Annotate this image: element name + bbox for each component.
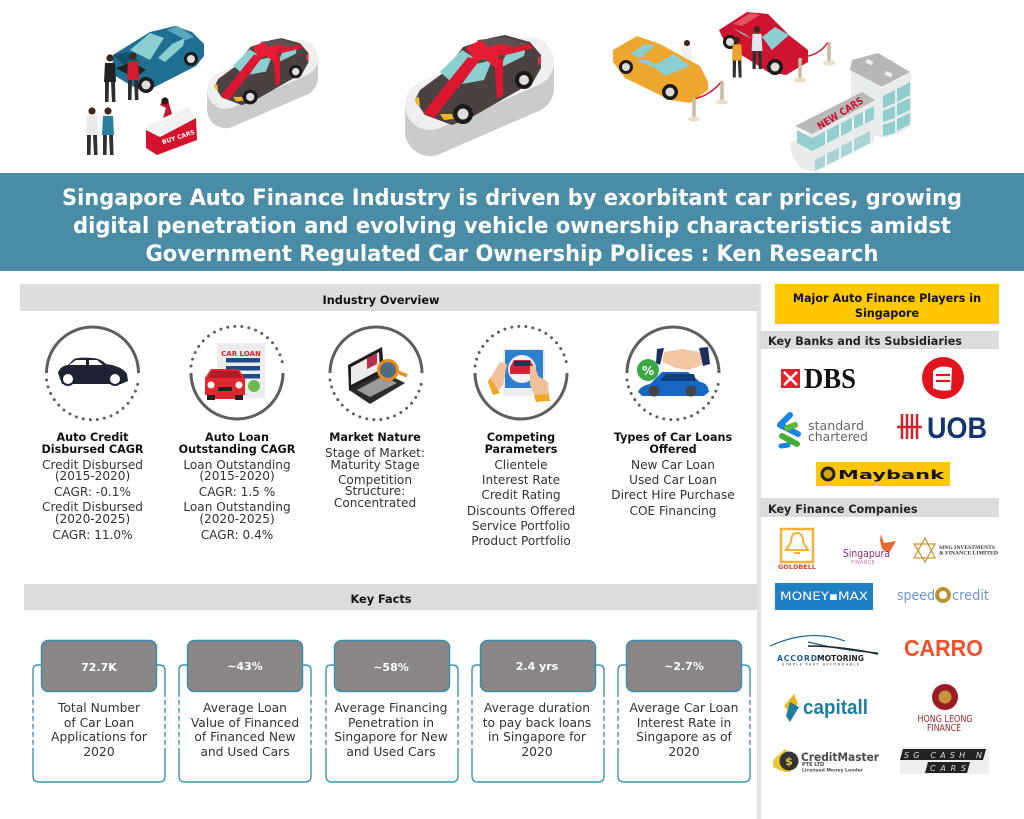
card: loan applications: 72.7K bbox=[81, 661, 117, 674]
column: auto credit disbursed: CAGR: 11.0% bbox=[52, 528, 133, 542]
column: types of car loans bbox=[611, 327, 735, 518]
card: loan applications: of Car Loan bbox=[64, 716, 134, 730]
logo: DBS: DBS bbox=[804, 364, 856, 395]
logo: Singapura Finance bbox=[843, 534, 896, 566]
column: competing parameters bbox=[467, 326, 575, 548]
illustration: salesman behind yellow car bbox=[682, 40, 692, 80]
column: market nature: Market Nature bbox=[329, 431, 421, 444]
card: loan applications: 2020 bbox=[83, 745, 115, 759]
title line 3: Government Regulated Car Ownership Polices : Ken Research bbox=[146, 242, 878, 267]
card: interest rate: 2020 bbox=[668, 745, 700, 759]
sidebar heading: major players bbox=[775, 284, 999, 324]
icon: handshake and blue car: % bbox=[642, 364, 654, 378]
logo: Accord Motoring: SIMPLE FAST AFFORDABLE bbox=[782, 662, 860, 666]
logo: Standard Chartered: chartered bbox=[808, 429, 868, 444]
column: market nature bbox=[325, 327, 425, 510]
column: market nature: Structure: bbox=[345, 484, 405, 498]
column: auto credit disbursed: Credit Disbursed bbox=[42, 458, 143, 472]
column: auto loan outstanding: (2015-2020) bbox=[199, 469, 275, 483]
logo: UOB bbox=[897, 412, 987, 445]
column: types of car loans: Direct Hire Purchase bbox=[611, 488, 735, 502]
card: loan applications: Applications for bbox=[51, 730, 148, 744]
card: interest rate: Average Car Loan bbox=[630, 701, 738, 715]
card: interest rate: Singapore as of bbox=[636, 730, 732, 744]
logo: Speed Credit: speed bbox=[897, 588, 935, 604]
card: financing penetration: ~58% bbox=[373, 661, 409, 674]
column: auto credit disbursed bbox=[41, 327, 144, 542]
heading: key facts bbox=[24, 584, 757, 610]
icon: car loan document bbox=[205, 343, 265, 400]
logo: CreditMaster: CreditMaster bbox=[801, 750, 879, 764]
person: man in white bbox=[86, 107, 98, 155]
person: salesman by red car bbox=[752, 26, 762, 69]
column: market nature: Maturity Stage bbox=[330, 458, 420, 472]
column: auto loan outstanding: Auto Loan bbox=[205, 431, 269, 444]
card: payback duration: 2020 bbox=[521, 745, 553, 759]
logo: Accord Motoring: MOTORING bbox=[817, 654, 864, 663]
logo: MoneyMax: MONEY▪MAX bbox=[780, 589, 868, 603]
logo: SG Cash N Cars: CARS bbox=[930, 764, 966, 773]
logo: Hong Leong Finance: HONG LEONG bbox=[918, 714, 972, 725]
card: loan applications bbox=[33, 640, 165, 782]
sidebar heading: key finance companies bbox=[760, 498, 999, 517]
card: financing penetration: Singapore for New bbox=[334, 730, 448, 744]
heading: key facts: Key Facts bbox=[350, 593, 412, 606]
column: auto credit disbursed: (2015-2020) bbox=[55, 469, 130, 483]
card: interest rate: Interest Rate in bbox=[637, 716, 731, 730]
column: auto loan outstanding bbox=[179, 326, 296, 542]
logo: Standard Chartered: standard bbox=[808, 418, 864, 433]
logo: Maybank bbox=[816, 462, 950, 486]
illustration: dealership team and blue car bbox=[86, 26, 204, 155]
person: man in blue bbox=[102, 107, 114, 155]
column: auto credit disbursed: Credit Disbursed bbox=[42, 500, 143, 514]
column: auto credit disbursed: CAGR: -0.1% bbox=[54, 485, 131, 499]
card: average loan value: Value of Financed bbox=[191, 716, 299, 730]
logo: Accord Motoring bbox=[770, 636, 878, 666]
logo: MoneyMax bbox=[775, 583, 873, 610]
column: auto credit disbursed: Auto Credit bbox=[56, 431, 129, 444]
logo: CreditMaster: PTE LTD bbox=[802, 762, 824, 768]
illustration: small gift car on pedestal bbox=[214, 38, 308, 110]
logo: CreditMaster: Licensed Money Lender bbox=[802, 768, 864, 774]
text: new cars sign: NEW CARS bbox=[816, 96, 866, 133]
logo: Singapura Finance: Singapura bbox=[843, 547, 890, 560]
logo: Sing Investments: SING INVESTMENTS bbox=[939, 545, 995, 551]
title banner bbox=[0, 173, 1024, 271]
column: competing parameters: Service Portfolio bbox=[472, 519, 570, 533]
card: average loan value bbox=[179, 640, 311, 782]
card: payback duration bbox=[472, 640, 604, 782]
column: types of car loans: Used Car Loan bbox=[629, 473, 717, 487]
card: payback duration: to pay back loans bbox=[483, 716, 591, 730]
logo: Capitall: capitall bbox=[803, 697, 868, 719]
column: auto loan outstanding: CAGR: 0.4% bbox=[201, 528, 273, 542]
card: loan applications: Total Number bbox=[57, 701, 141, 715]
icon: handshake and blue car bbox=[637, 347, 710, 396]
column: auto credit disbursed: Disbursed CAGR bbox=[41, 443, 144, 456]
column: competing parameters: Discounts Offered bbox=[467, 504, 575, 518]
column: auto loan outstanding: Loan Outstanding bbox=[183, 458, 291, 472]
column: auto loan outstanding: Loan Outstanding bbox=[183, 500, 291, 514]
card: payback duration: in Singapore for bbox=[488, 730, 587, 744]
logo: Speed Credit bbox=[897, 588, 989, 604]
card: financing penetration: Average Financing bbox=[335, 701, 447, 715]
card: financing penetration: Penetration in bbox=[348, 716, 434, 730]
illustration: main gift car on pedestal bbox=[415, 35, 541, 131]
logo: SG Cash N Cars: SG CASH N bbox=[904, 751, 982, 760]
person: customer in red bbox=[127, 52, 139, 100]
card: financing penetration bbox=[326, 640, 458, 782]
logo: Sing Investments: & FINANCE LIMITED bbox=[939, 550, 998, 556]
sidebar heading: key banks: Key Banks and its Subsidiaries bbox=[768, 335, 962, 348]
logo: Accord Motoring: ACCORD bbox=[777, 654, 817, 663]
column: competing parameters: Credit Rating bbox=[481, 488, 561, 502]
vertical divider bbox=[757, 284, 761, 819]
logo: Goldbell bbox=[778, 529, 816, 571]
logo: UOB: UOB bbox=[927, 412, 987, 445]
column: types of car loans: Types of Car Loans bbox=[614, 431, 733, 444]
illustration: rope barriers bbox=[688, 42, 835, 122]
sidebar heading: major players: Singapore bbox=[855, 307, 920, 320]
column: competing parameters: Clientele bbox=[494, 458, 548, 472]
card: average loan value: ~43% bbox=[227, 660, 263, 673]
person: salesman in black bbox=[104, 54, 116, 102]
logo: Standard Chartered bbox=[780, 415, 868, 446]
column: types of car loans: COE Financing bbox=[630, 504, 716, 518]
card: financing penetration: and Used Cars bbox=[346, 745, 436, 759]
logo: Maybank: Maybank bbox=[838, 468, 946, 482]
logo: CreditMaster: $ bbox=[785, 755, 793, 768]
illustration: red sales desk bbox=[146, 97, 197, 155]
column: market nature: Concentrated bbox=[334, 496, 416, 510]
column: types of car loans: Offered bbox=[649, 443, 697, 456]
heading: industry overview: Industry Overview bbox=[323, 294, 440, 307]
column: competing parameters: Product Portfolio bbox=[471, 534, 571, 548]
column: market nature: Competition bbox=[338, 473, 412, 487]
logo: Speed Credit: credit bbox=[952, 588, 989, 604]
column: auto loan outstanding: (2020-2025) bbox=[199, 512, 275, 526]
logo: Hong Leong Finance: FINANCE bbox=[927, 723, 961, 734]
card: payback duration: Average duration bbox=[484, 701, 590, 715]
card: payback duration: 2.4 yrs bbox=[516, 660, 559, 673]
card: interest rate: ~2.7% bbox=[664, 660, 704, 673]
column: market nature: Stage of Market: bbox=[325, 446, 425, 460]
column: auto credit disbursed: (2020-2025) bbox=[55, 512, 130, 526]
icon: black car bbox=[58, 358, 128, 386]
sidebar heading: key finance companies: Key Finance Companies bbox=[768, 503, 918, 516]
heading: industry overview bbox=[20, 284, 759, 311]
card: interest rate bbox=[618, 640, 750, 782]
column: competing parameters: Competing bbox=[487, 431, 555, 444]
column: competing parameters: Interest Rate bbox=[482, 473, 560, 487]
icon: car loan document: CAR LOAN bbox=[221, 350, 261, 358]
logo: Carro: CARRO bbox=[904, 635, 983, 661]
column: types of car loans: New Car Loan bbox=[631, 458, 715, 472]
column: auto loan outstanding: Outstanding CAGR bbox=[179, 443, 296, 456]
logo: CreditMaster bbox=[773, 749, 879, 774]
title line 2: digital penetration and evolving vehicle ownership characteristics amidst bbox=[73, 214, 951, 239]
card: average loan value: and Used Cars bbox=[200, 745, 290, 759]
illustration: yellow car bbox=[613, 36, 708, 103]
card: average loan value: Average Loan bbox=[203, 701, 287, 715]
logo: Capitall bbox=[784, 694, 868, 722]
icon: hand on tablet bbox=[488, 349, 550, 402]
column: competing parameters: Parameters bbox=[485, 443, 558, 456]
logo: SG Cash N Cars bbox=[900, 747, 989, 774]
illustration: red sales desk: BUY CARS bbox=[161, 129, 196, 146]
card: average loan value: of Financed New bbox=[194, 730, 296, 744]
logo: Singapura Finance: FINANCE bbox=[851, 560, 875, 566]
logo: Sing Investments bbox=[914, 538, 998, 562]
illustration: red car bbox=[719, 12, 808, 78]
icon: laptop with magnifier bbox=[348, 347, 407, 404]
logo: OCBC bbox=[922, 357, 964, 399]
column: auto loan outstanding: CAGR: 1.5 % bbox=[199, 485, 275, 499]
logo: DBS bbox=[781, 364, 856, 395]
title line 1: Singapore Auto Finance Industry is driven by exorbitant car prices, growing bbox=[62, 186, 962, 211]
sidebar heading: major players: Major Auto Finance Players in bbox=[793, 292, 981, 305]
sidebar heading: key banks bbox=[760, 331, 999, 349]
logo: Goldbell: GOLDBELL bbox=[778, 563, 816, 571]
logo: Hong Leong Finance bbox=[918, 684, 972, 734]
person: customer in yellow bbox=[732, 37, 742, 78]
illustration: new cars showroom building bbox=[790, 53, 911, 172]
